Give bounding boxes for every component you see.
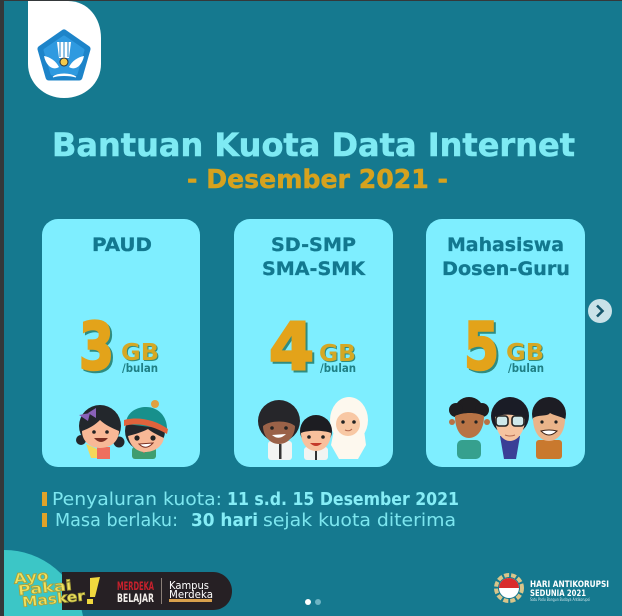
- data amount: 3 GB per month: [79, 310, 160, 387]
- title: - Desember 2021 -: [187, 165, 448, 195]
- logo: Hari Antikorupsi Sedunia 2021: [496, 575, 609, 602]
- data amount: 4 GB per month: GB: [320, 342, 357, 368]
- panel: Mahasiswa Dosen-Guru: [426, 219, 585, 467]
- text block: distribution and validity: Masa berlaku:: [55, 511, 178, 531]
- panel: PAUD: [42, 219, 200, 467]
- title: [52, 126, 575, 195]
- panel: SD-SMP SMA-SMK: [234, 219, 393, 467]
- carousel dots: [305, 599, 321, 605]
- banner: Ayo Pakai Masker and Merdeka Belajar: [4, 550, 232, 616]
- carousel next arrow: [588, 299, 612, 323]
- data amount: 3 GB per month: /bulan: [122, 361, 158, 375]
- heading: Mahasiswa Dosen-Guru: Mahasiswa: [447, 234, 564, 256]
- heading: SD-SMP SMA-SMK: SMA-SMK: [262, 258, 366, 280]
- Ayo Pakai Masker slogan: Pakai: [17, 578, 73, 599]
- logo: Hari Antikorupsi Sedunia 2021: Satu Padu Bangun Budaya Antikorupsi: [530, 597, 590, 602]
- data amount: 3 GB per month: GB: [121, 340, 159, 366]
- icon: two children: [76, 400, 168, 459]
- text block: distribution and validity: 30 hari: [191, 511, 258, 531]
- data amount: 4 GB per month: /bulan: [320, 361, 356, 375]
- data amount: 5 GB per month: 5: [464, 310, 499, 385]
- data amount: 4 GB per month: GB: [319, 341, 356, 367]
- Ayo Pakai Masker slogan: Ayo: [13, 568, 50, 588]
- logo: Hari Antikorupsi Sedunia 2021: SEDUNIA 2021: [530, 589, 586, 599]
- Ayo Pakai Masker slogan: Masker: [21, 588, 86, 611]
- data amount: 5 GB per month: GB: [507, 341, 545, 367]
- title: Bantuan Kuota Data Internet: [52, 126, 575, 164]
- logo badge: [28, 1, 101, 98]
- data amount: 5 GB per month: /bulan: [508, 361, 544, 375]
- heading: SD-SMP SMA-SMK: SD-SMP: [271, 234, 356, 256]
- data amount: 4 GB per month: [269, 310, 357, 387]
- data amount: 5 GB per month: GB: [506, 340, 544, 366]
- data amount: 5 GB per month: 5: [466, 312, 501, 387]
- data amount: 3 GB per month: 3: [81, 312, 116, 387]
- exclamation mark: [87, 577, 100, 604]
- data amount: 3 GB per month: GB: [122, 341, 160, 367]
- heading: Mahasiswa Dosen-Guru: Dosen-Guru: [442, 258, 570, 280]
- data amount: 3 GB per month: 3: [79, 310, 114, 385]
- text block: distribution and validity: [42, 490, 459, 531]
- banner: Ayo Pakai Masker and Merdeka Belajar: Merdeka: [169, 589, 213, 601]
- heading: SD-SMP SMA-SMK: [262, 234, 366, 280]
- text block: distribution and validity: 11 s.d. 15 Desember 2021: [227, 490, 459, 510]
- data amount: 4 GB per month: 4: [271, 312, 316, 387]
- data amount: 5 GB per month: [464, 310, 545, 387]
- heading: Mahasiswa Dosen-Guru: [442, 234, 570, 280]
- banner: Ayo Pakai Masker and Merdeka Belajar: MERDEKA: [117, 579, 154, 593]
- text block: distribution and validity: sejak kuota diterima: [263, 511, 456, 531]
- banner: Ayo Pakai Masker and Merdeka Belajar: Kampus: [169, 580, 209, 592]
- heading: PAUD: PAUD: [92, 234, 152, 256]
- icon: three students: [258, 397, 368, 460]
- Ayo Pakai Masker slogan: [13, 565, 86, 612]
- icon: student, lecturer and teacher: [449, 397, 566, 459]
- banner: Ayo Pakai Masker and Merdeka Belajar: BELAJAR: [117, 591, 154, 605]
- data amount: 4 GB per month: 4: [269, 310, 314, 385]
- text block: distribution and validity: Penyaluran kuota:: [52, 490, 222, 510]
